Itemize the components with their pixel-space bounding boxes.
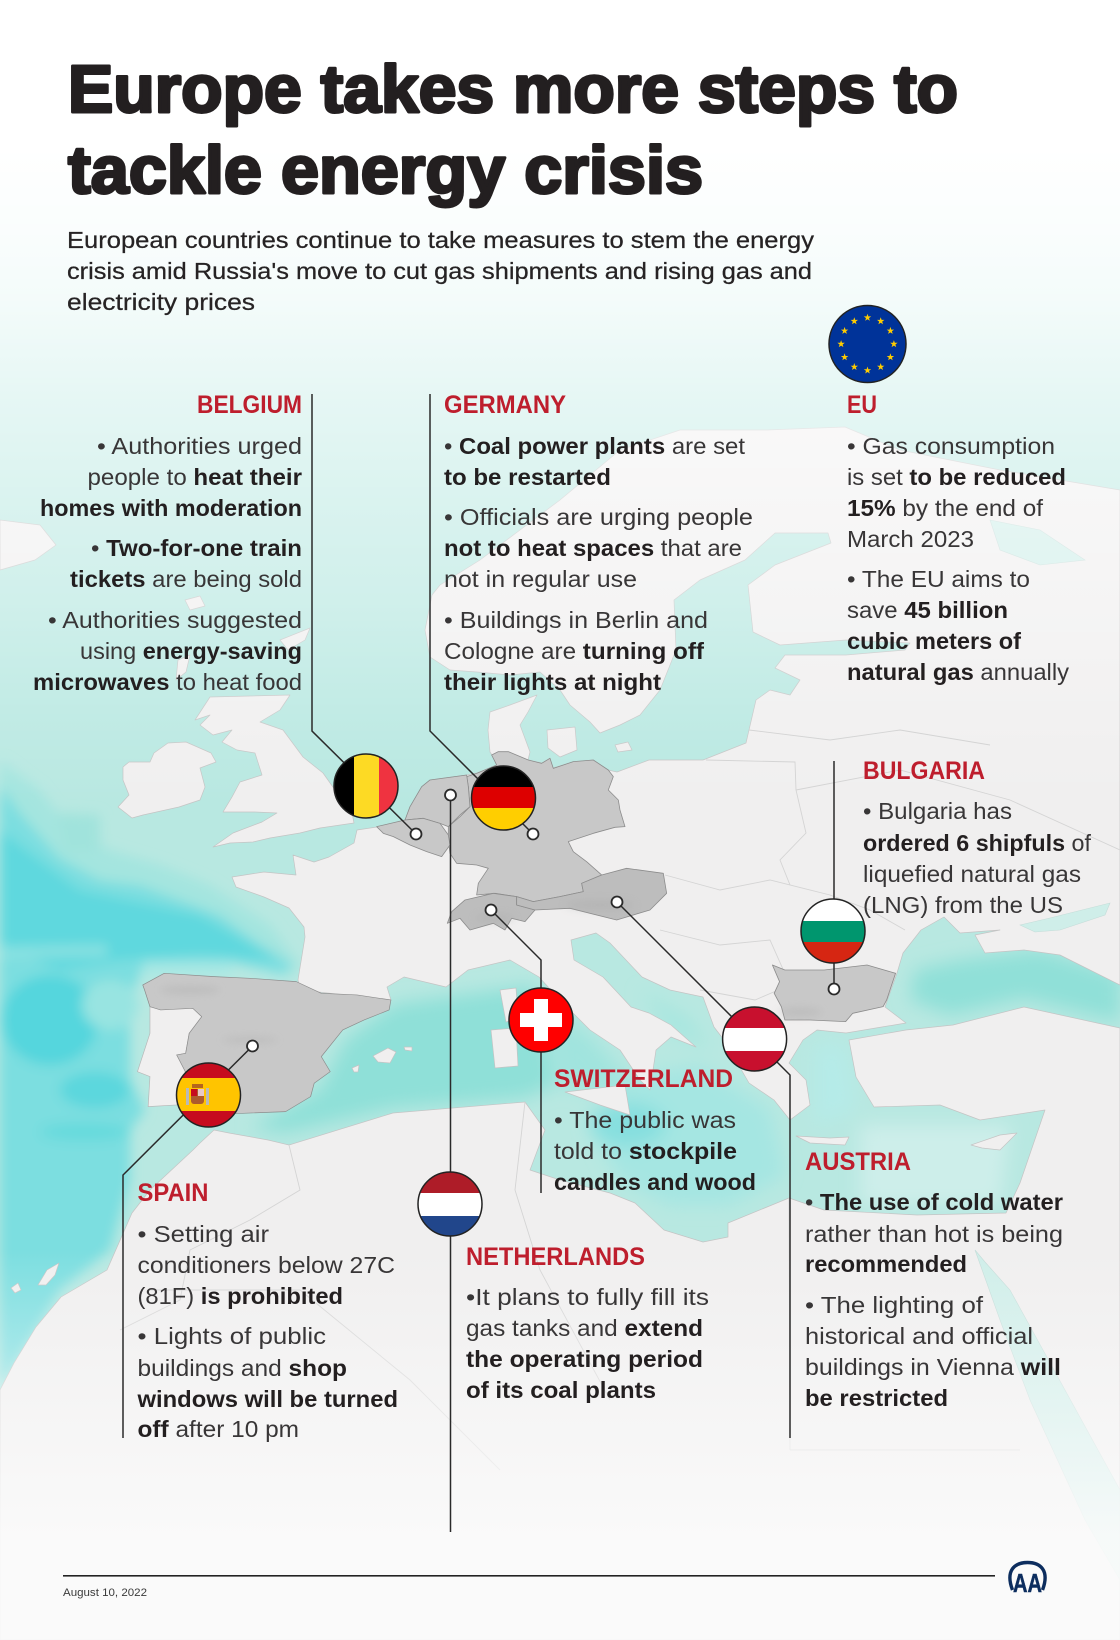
- heading: Switzerland: SWITZERLAND: [554, 1065, 733, 1093]
- country borders: [120, 730, 1120, 1470]
- fine land masses: [0, 427, 1120, 1640]
- text: EU measures: 15% by the end of: [847, 495, 1043, 521]
- heading: EU: EU: [847, 391, 877, 419]
- panel: Switzerland: [486, 904, 756, 1195]
- text: Germany measures: Cologne are turning off: [444, 638, 704, 664]
- icon: Dutch flag: [419, 1172, 481, 1236]
- text: Netherlands measures: the operating period: [466, 1346, 703, 1372]
- icon: Austrian flag: [723, 1008, 786, 1070]
- text: Switzerland measures: candles and wood: [554, 1169, 756, 1195]
- text: Austria measures: [805, 1189, 1063, 1411]
- text: Belgium measures: microwaves to heat food: [33, 669, 302, 695]
- text: Spain measures: [136, 1221, 398, 1442]
- text: Bulgaria measures: liquefied natural gas: [863, 861, 1081, 887]
- highlighted countries: [143, 752, 896, 1113]
- text: Spain measures: (81F) is prohibited: [138, 1283, 343, 1309]
- text: EU measures: is set to be reduced: [847, 464, 1066, 490]
- date: August 10, 2022: [63, 1587, 147, 1599]
- text: Belgium measures: tickets are being sold: [70, 566, 302, 592]
- text: Austria measures: be restricted: [805, 1385, 948, 1411]
- panel: Germany: [430, 391, 753, 840]
- flag rim: Spain: [176, 1063, 240, 1127]
- text: Bulgaria measures: ordered 6 shipfuls of: [863, 830, 1091, 856]
- heading: Spain: SPAIN: [138, 1179, 208, 1207]
- text: Germany measures: not in regular use: [444, 566, 637, 592]
- flag rim: Austria: [723, 1007, 787, 1071]
- text: Belgium measures: people to heat their: [88, 464, 302, 490]
- text: Austria measures: rather than hot is being: [805, 1221, 1063, 1247]
- text: EU measures: natural gas annually: [847, 659, 1069, 685]
- connector: Belgium: [312, 394, 422, 840]
- icon: Bulgarian flag: [800, 898, 866, 964]
- title: [68, 52, 958, 208]
- text: Spain measures: • Lights of public: [138, 1323, 326, 1349]
- subtitle: [67, 227, 814, 315]
- connector: Spain: [123, 1040, 258, 1438]
- flag rim: Switzerland: [509, 988, 573, 1052]
- icon: Belgian flag: [334, 754, 398, 818]
- text: Belgium measures: using energy-saving: [80, 638, 302, 664]
- text: Austria measures: • The use of cold water: [805, 1189, 1063, 1215]
- text: Belgium measures: • Authorities urged: [97, 433, 302, 459]
- text: Germany measures: • Officials are urging people: [444, 504, 753, 530]
- footer rule: [63, 1575, 995, 1577]
- heading: Netherlands: NETHERLANDS: [466, 1243, 645, 1271]
- text: Germany measures: not to heat spaces that are: [444, 535, 742, 561]
- text: Netherlands measures: gas tanks and extend: [466, 1315, 703, 1341]
- text: Switzerland measures: told to stockpile: [554, 1138, 737, 1164]
- text: Austria measures: recommended: [805, 1251, 967, 1277]
- text: Spain measures: windows will be turned: [136, 1386, 398, 1412]
- text: Netherlands measures: [466, 1284, 709, 1403]
- portugal light region: [137, 1007, 202, 1107]
- text: Belgium measures: • Two-for-one train: [91, 535, 302, 561]
- text: Germany measures: to be restarted: [444, 464, 611, 490]
- logo: AA: AA: [1013, 1568, 1042, 1598]
- text: EU measures: save 45 billion: [847, 597, 1008, 623]
- text: Spain measures: off after 10 pm: [138, 1416, 299, 1442]
- panel: Belgium: [33, 391, 422, 840]
- text: EU measures: • Gas consumption: [847, 433, 1055, 459]
- text: Belgium measures: • Authorities suggested: [48, 607, 302, 633]
- connector: Germany: [430, 394, 538, 840]
- text: Germany measures: • Coal power plants are set: [444, 433, 745, 459]
- text: Belgium measures: homes with moderation: [40, 495, 302, 521]
- text: EU measures: [847, 433, 1069, 685]
- terrain shading: [160, 900, 822, 1043]
- panel: Bulgaria: [800, 757, 1091, 994]
- heading: Austria: AUSTRIA: [805, 1148, 911, 1176]
- panel: Spain: [123, 1040, 398, 1442]
- logo: AA: [1010, 1562, 1045, 1598]
- heading: Germany: GERMANY: [444, 391, 566, 419]
- text: Spain measures: • Setting air: [138, 1221, 269, 1247]
- connector: Switzerland: [486, 904, 541, 1193]
- text: EU measures: cubic meters of: [847, 628, 1021, 654]
- text: Belgium measures: [33, 433, 302, 695]
- inland waters: [975, 520, 1120, 1580]
- text: EU measures: • The EU aims to: [847, 566, 1030, 592]
- title: Europe takes more steps to: [68, 52, 958, 127]
- title: tackle energy crisis: [68, 133, 703, 208]
- connector: Austria: [612, 896, 790, 1438]
- text: Germany measures: • Buildings in Berlin and: [444, 607, 708, 633]
- icon: Swiss flag: [509, 988, 573, 1052]
- text: Netherlands measures: •It plans to fully fill its: [466, 1284, 709, 1310]
- panel: Austria: [612, 896, 1063, 1438]
- icon: EU flag: [829, 306, 906, 382]
- heading: Belgium: BELGIUM: [197, 391, 302, 419]
- panel: Netherlands: [416, 790, 709, 1532]
- subtitle: European countries continue to take measures to stem the energy: [67, 227, 814, 253]
- text: Switzerland measures: [554, 1107, 756, 1195]
- flag rim: Belgium: [334, 754, 398, 818]
- heading: Bulgaria: BULGARIA: [863, 757, 985, 785]
- panel: EU: [829, 306, 1069, 685]
- text: EU measures: March 2023: [847, 526, 974, 552]
- flag rim: Netherlands: [418, 1172, 482, 1236]
- icon: Spanish flag: [177, 1064, 240, 1126]
- text: Spain measures: buildings and shop: [138, 1355, 347, 1381]
- flag rim: Germany: [472, 766, 536, 830]
- text: Switzerland measures: • The public was: [554, 1107, 736, 1133]
- icon: German flag: [472, 766, 535, 830]
- text: Bulgaria measures: [863, 798, 1091, 918]
- subtitle: crisis amid Russia's move to cut gas shipments and rising gas and: [67, 258, 812, 284]
- text: Germany measures: [444, 433, 753, 695]
- text: Netherlands measures: of its coal plants: [466, 1377, 656, 1403]
- text: Austria measures: historical and official: [805, 1323, 1033, 1349]
- connector: Bulgaria: [828, 761, 840, 994]
- text: Bulgaria measures: • Bulgaria has: [863, 798, 1012, 824]
- text: Austria measures: • The lighting of: [805, 1292, 984, 1318]
- text: Spain measures: conditioners below 27C: [138, 1252, 395, 1278]
- text: Germany measures: their lights at night: [444, 669, 661, 695]
- flag rim: Bulgaria: [801, 899, 865, 963]
- subtitle: electricity prices: [67, 289, 255, 315]
- text: Bulgaria measures: (LNG) from the US: [863, 892, 1063, 918]
- text: Austria measures: buildings in Vienna will: [805, 1354, 1061, 1380]
- connector: Netherlands: [445, 790, 456, 1532]
